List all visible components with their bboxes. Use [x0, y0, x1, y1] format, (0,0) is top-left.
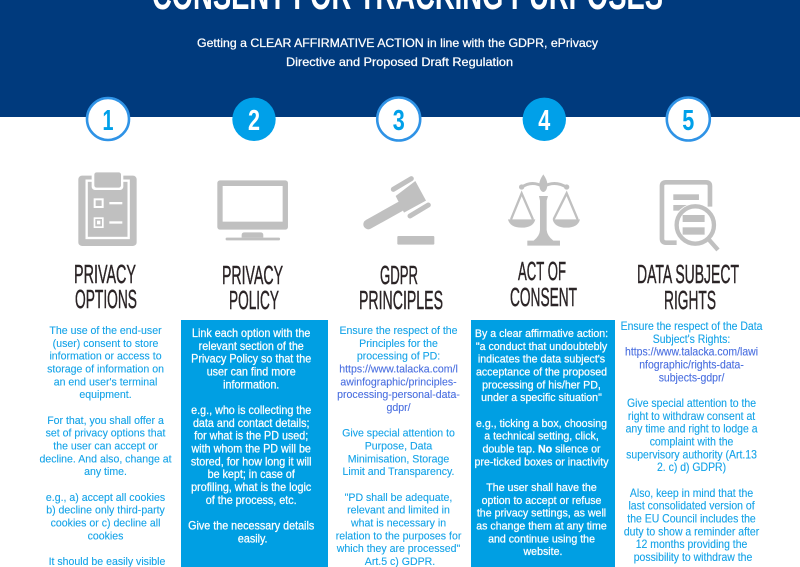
step 4 badge — [523, 98, 566, 141]
text block: privacy policy: Privacy Policy so that the — [191, 353, 311, 366]
header band — [0, 0, 800, 117]
panel: act of consent — [471, 320, 615, 567]
text block: privacy options: an end user's terminal — [54, 376, 157, 388]
text block: data subject rights: Also, keep in mind that the — [630, 487, 753, 500]
text block: gdpr principles: relation to the purposes for — [336, 530, 462, 542]
text block: privacy options: equipment. — [79, 389, 132, 401]
step 1 badge — [87, 98, 129, 140]
step 1 badge: 1 — [102, 105, 114, 137]
step 2 badge — [232, 98, 276, 141]
subtitle: Getting a CLEAR AFFIRMATIVE ACTION in line with the GDPR, ePrivacy — [197, 36, 598, 50]
text block: privacy options: The use of the end-user — [49, 325, 162, 337]
icon: scales — [508, 174, 580, 246]
text block: privacy policy: of the process, etc. — [206, 495, 297, 507]
text block: privacy options: (user) consent to store — [53, 337, 158, 350]
text block: act of consent: under a specific situation" — [481, 392, 602, 404]
heading: privacy options — [74, 259, 137, 314]
text block: act of consent: option to accept or refuse — [482, 494, 601, 507]
step 5 badge: 5 — [682, 105, 694, 137]
text block: gdpr principles: Give special attention to — [342, 427, 455, 440]
text block: privacy policy: relevant section of the — [199, 341, 304, 353]
text block: gdpr principles: Minimisation, Storage — [348, 453, 449, 465]
text block: data subject rights: Subject's Rights: — [653, 333, 730, 346]
text block: act of consent: the privacy settings, as well — [477, 507, 606, 520]
text block: privacy options: decline. And also, change at — [39, 453, 172, 465]
text block: privacy options: cookies — [88, 530, 124, 542]
panel: privacy policy — [181, 320, 328, 567]
text block: act of consent: double tap. No silence or — [482, 443, 601, 456]
heading: privacy options: PRIVACY — [74, 259, 136, 289]
step 2 badge: 2 — [248, 105, 260, 137]
text block: privacy policy: be kept; in case of — [208, 469, 296, 481]
text block: gdpr principles: Purpose, Data — [365, 440, 433, 453]
text block: gdpr principles: "PD shall be adequate, — [345, 491, 452, 504]
text block: privacy policy: e.g., who is collecting the — [191, 405, 311, 417]
heading: privacy policy — [222, 260, 283, 315]
heading: gdpr principles: PRINCIPLES — [359, 285, 443, 315]
step 3 badge — [377, 98, 420, 140]
text block: data subject rights: 2. c) d) GDPR) — [657, 462, 726, 474]
text block: privacy options: information or access to — [49, 350, 162, 363]
text block: data subject rights: Ensure the respect of the Data — [621, 321, 763, 333]
text block: data subject rights: duty to show a reminder after — [624, 526, 760, 538]
heading: act of consent — [510, 256, 577, 312]
text block: privacy options: storage of information on — [47, 363, 164, 376]
step 5 badge — [667, 98, 710, 140]
text block: act of consent: and continue using the — [488, 533, 595, 545]
heading: privacy policy: PRIVACY — [222, 260, 283, 290]
text block: data subject rights: right to withdraw consent at — [628, 410, 755, 423]
text block: privacy policy: Link each option with the — [192, 328, 310, 340]
text block: privacy options: cookies or c) decline all — [51, 517, 160, 530]
heading: privacy policy: POLICY — [229, 285, 279, 315]
text block: gdpr principles: Principles for the — [359, 337, 438, 350]
text block: act of consent: indicates the data subject's — [478, 353, 606, 366]
text block: act of consent: a technical setting, click, — [484, 430, 599, 443]
text block: privacy options: b) decline only third-party — [46, 504, 165, 517]
text block: data subject rights: nfographic/rights-data- — [639, 359, 744, 372]
text block: privacy policy: for what is the PD used; — [194, 430, 308, 443]
text block: gdpr principles: Limit and Transparency. — [343, 466, 454, 478]
text block: act of consent: "a conduct that undoubtebly — [476, 340, 608, 353]
step 3 badge: 3 — [393, 105, 405, 137]
text block: act of consent: By a clear affirmative action: — [475, 328, 608, 340]
text block: gdpr principles: what is necessary in — [350, 517, 446, 530]
text block: data subject rights: last consolidated version of — [628, 500, 756, 513]
heading: act of consent: CONSENT — [510, 282, 577, 312]
text block: gdpr principles: awinfographic/principles- — [340, 376, 457, 388]
text block: data subject rights: supervisory authority (Art.13 — [626, 449, 757, 461]
text block: data subject rights: 12 months providing the — [636, 539, 747, 551]
text block: gdpr principles: relevant and limited in — [347, 504, 450, 517]
text block: privacy options: set of privacy options that — [46, 427, 165, 440]
text block: privacy policy: user can find more — [207, 366, 296, 379]
text block: privacy policy: information. — [223, 379, 279, 391]
icon: clipboard — [78, 170, 137, 246]
text block: privacy options: any time. — [84, 466, 127, 478]
heading: act of consent: ACT OF — [518, 256, 566, 286]
text block: act of consent: acceptance of the proposed — [476, 366, 607, 379]
heading: data subject rights — [637, 259, 739, 315]
subtitle: Directive and Proposed Draft Regulation — [286, 55, 513, 69]
text block: privacy options: e.g., a) accept all cookies — [46, 491, 166, 504]
text block: data subject rights: subjects-gdpr/ — [659, 372, 725, 384]
text block: act of consent: The user shall have the — [486, 482, 597, 494]
text block: gdpr principles: https://www.talacka.com/l — [339, 363, 458, 376]
text block: gdpr principles: gdpr/ — [386, 402, 411, 414]
text block: gdpr principles: which they are processed" — [336, 543, 460, 555]
text block: privacy policy: stored, for how long it will — [191, 456, 312, 468]
text block: data subject rights: possibility to withdraw the — [634, 552, 752, 564]
heading: data subject rights: RIGHTS — [664, 285, 716, 315]
heading: gdpr principles — [359, 260, 443, 315]
text block: data subject rights: any time and right to lodge a — [626, 423, 758, 436]
text block: privacy policy: data and contact details; — [193, 418, 309, 430]
text block: act of consent: pre-ticked boxes or inactivity — [475, 456, 609, 468]
text block: act of consent: website. — [523, 546, 562, 558]
text block: gdpr principles: processing-personal-data- — [337, 389, 460, 401]
heading: gdpr principles: GDPR — [380, 260, 418, 290]
text block: data subject rights: the EU Council includes the — [627, 513, 756, 526]
heading: privacy options: OPTIONS — [75, 284, 137, 314]
subtitle — [197, 36, 598, 69]
text block: data subject rights: https://www.talacka.com/lawi — [625, 346, 758, 359]
icon: document with magnifier — [662, 182, 718, 250]
step 4 badge: 4 — [538, 105, 550, 137]
text block: gdpr principles: processing of PD: — [357, 350, 440, 363]
text block: gdpr principles: Ensure the respect of the — [340, 325, 458, 337]
text block: privacy policy: Give the necessary details — [188, 520, 315, 533]
text block: privacy policy: with whom the PD will be — [191, 443, 311, 456]
text block: privacy policy: easily. — [238, 533, 268, 545]
text block: privacy options: For that, you shall offer a — [47, 414, 165, 427]
text block: data subject rights: Give special attention to the — [627, 398, 756, 410]
text block: data subject rights: complaint with the — [650, 436, 733, 449]
icon: monitor — [217, 180, 288, 240]
icon: gavel — [368, 179, 434, 245]
text block: act of consent: e.g., ticking a box, choosing — [476, 417, 607, 430]
text block: privacy policy: profiling, what is the logic — [191, 482, 312, 494]
text block: act of consent: processing of his/her PD, — [482, 379, 601, 391]
text block: act of consent: as change them at any time — [476, 520, 607, 533]
text block: privacy options: the user can accept or — [53, 440, 158, 453]
